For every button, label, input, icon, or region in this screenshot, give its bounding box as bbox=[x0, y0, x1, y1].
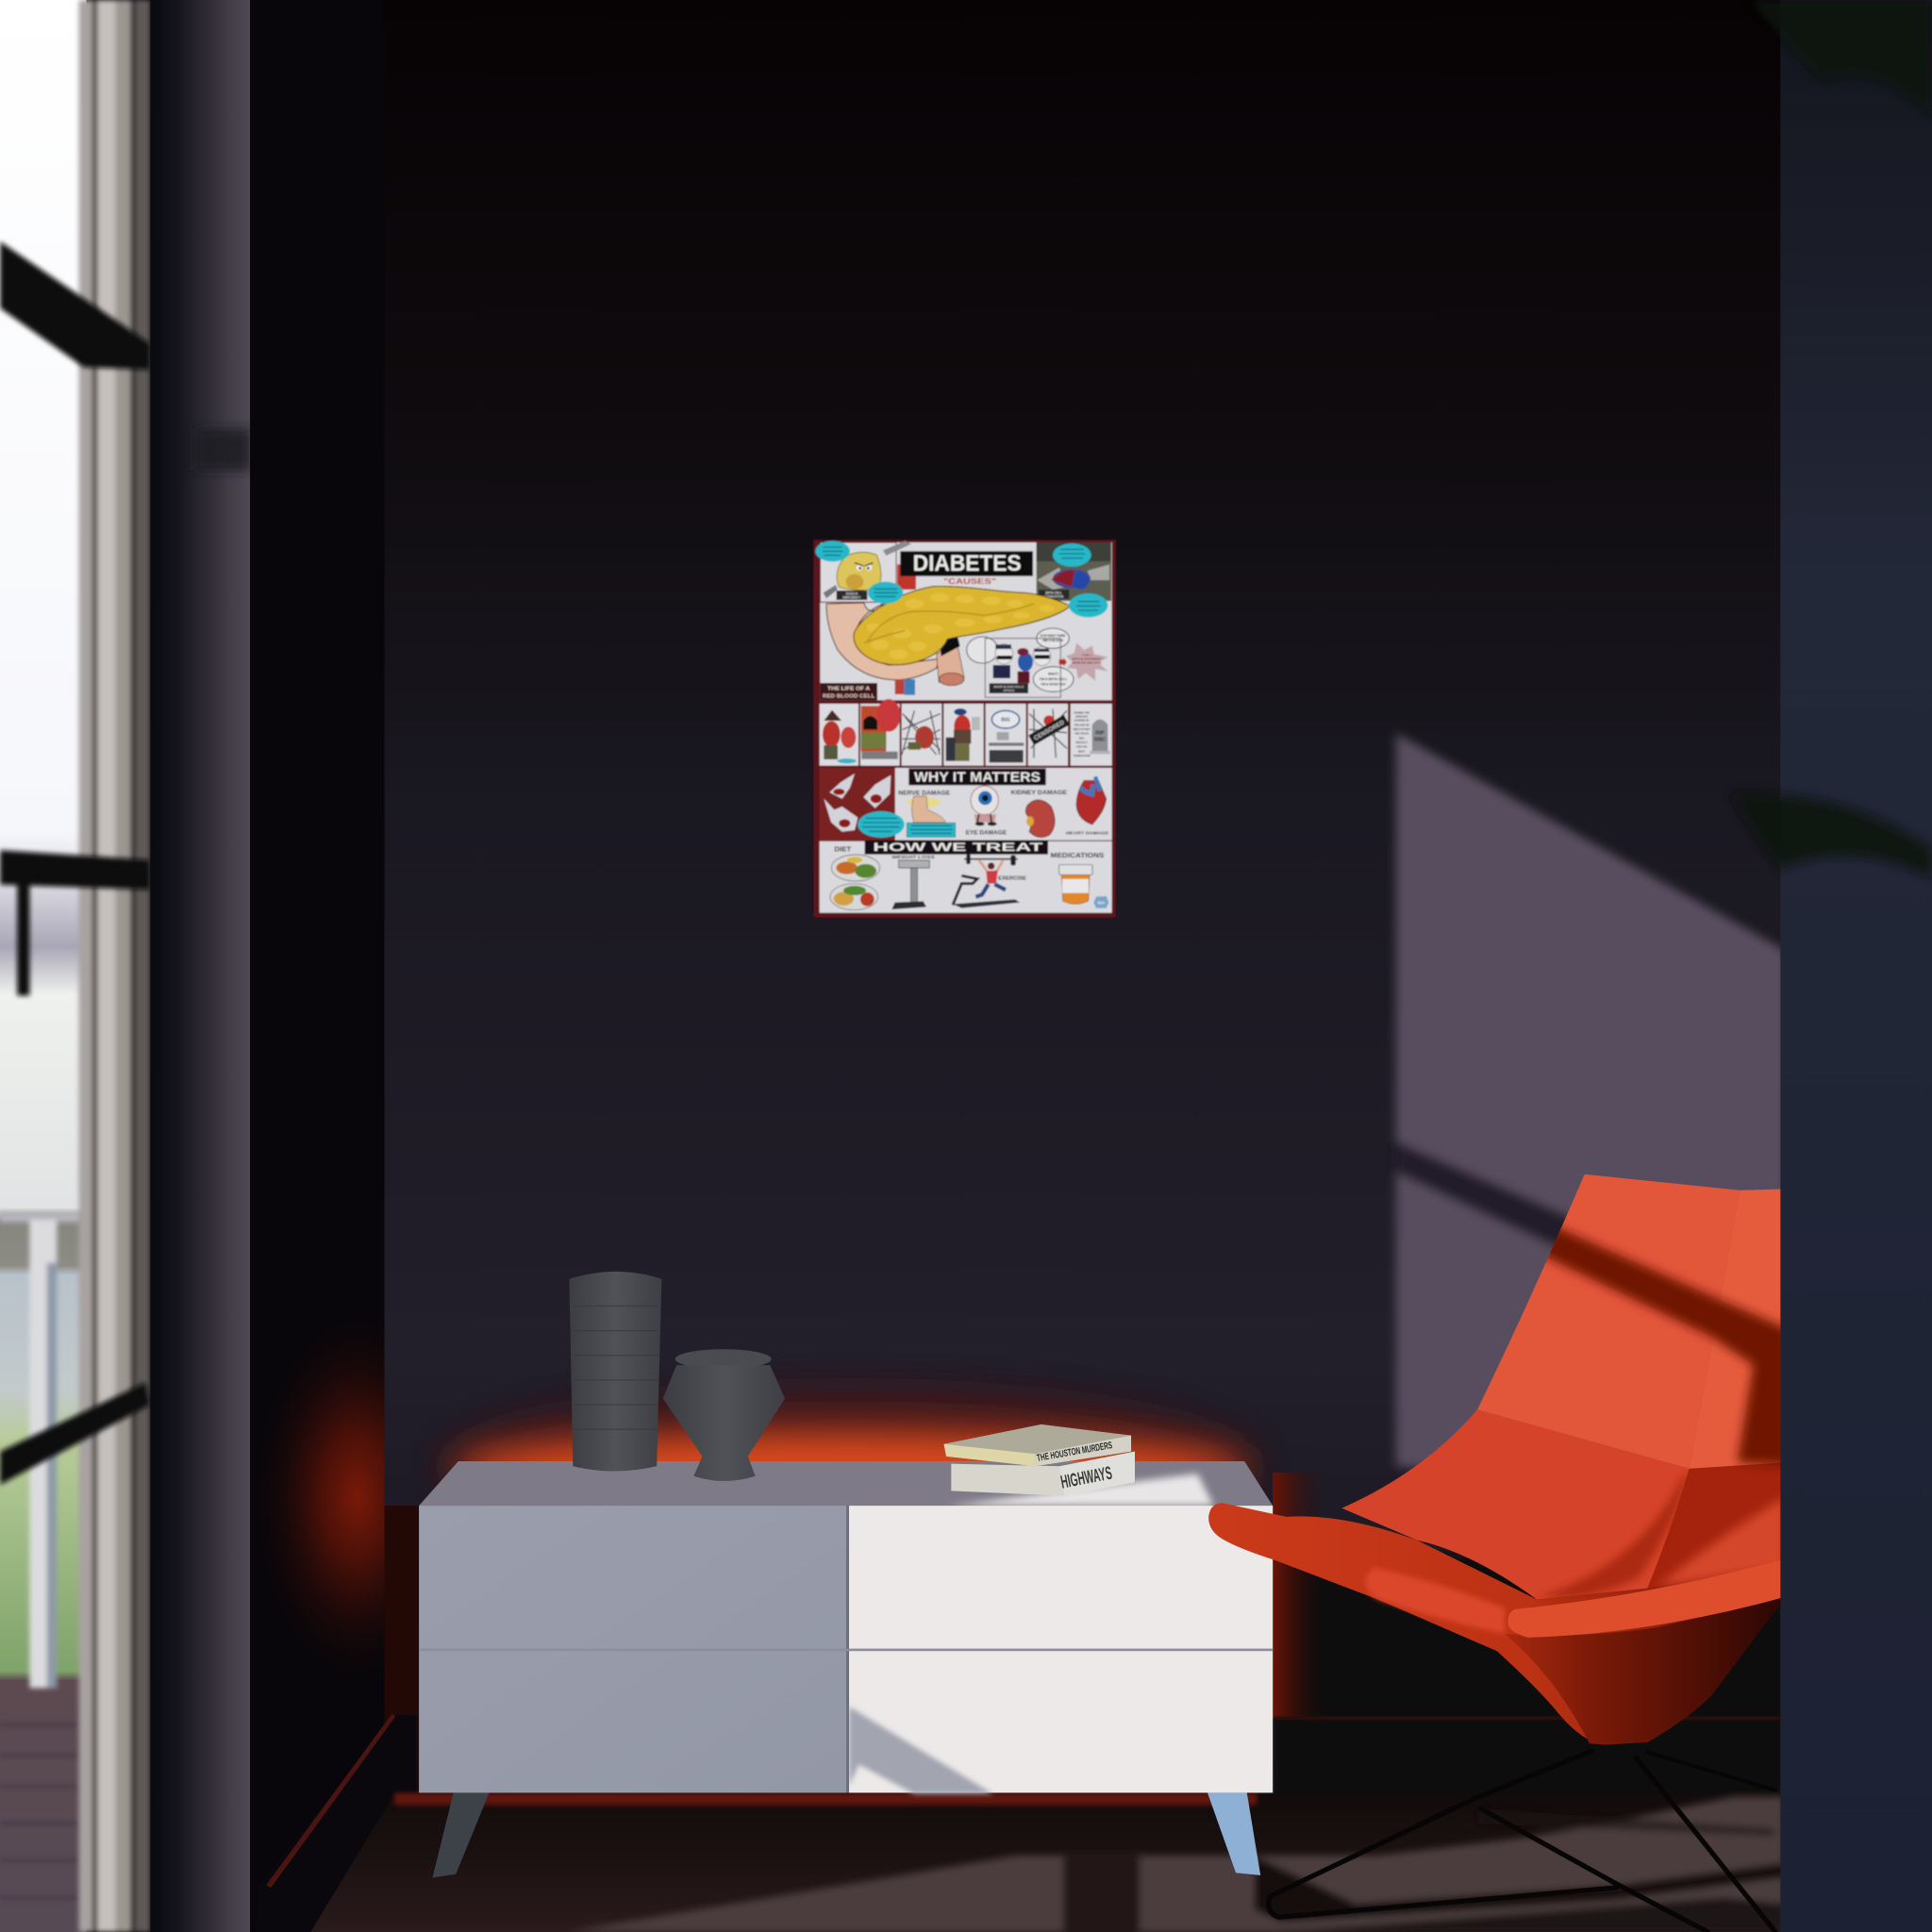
strip panel 7: NEXT bbox=[1078, 749, 1086, 753]
cyan callouts bbox=[815, 541, 1108, 617]
red glow beside sideboard bbox=[1273, 1473, 1324, 1719]
red blood cell story strip bbox=[820, 699, 1112, 766]
insulin deficiency panel bbox=[820, 542, 896, 602]
right foreground pillar bbox=[1780, 0, 1932, 1932]
character: exhausted beta cell bbox=[1053, 569, 1091, 588]
censored label: CENSORED bbox=[1033, 719, 1066, 742]
chair back bbox=[1477, 1174, 1740, 1469]
chair right seat highlight bbox=[1657, 1497, 1786, 1587]
icon: gravestone bbox=[1092, 719, 1108, 753]
label: insulin deficiency bbox=[837, 591, 867, 600]
title bar: DIABETES bbox=[913, 551, 1022, 576]
dim glow above sideboard bbox=[443, 1390, 1257, 1542]
sideboard right doors bbox=[849, 1506, 1273, 1792]
back wall bbox=[370, 0, 1799, 1932]
label: beta cell exhaustion bbox=[1039, 590, 1069, 599]
speech bubble lower right bbox=[1033, 667, 1074, 691]
icon: foot bbox=[908, 796, 945, 823]
stacked books bbox=[943, 1424, 1135, 1496]
speech text bbox=[1040, 633, 1068, 686]
strip panel 7 bbox=[1071, 704, 1112, 766]
starburst: type 1 diabetes: TYPE 1 bbox=[1082, 654, 1091, 658]
speech bubble left bbox=[967, 637, 998, 663]
strip panel 7: THE LIFE OF bbox=[1074, 723, 1090, 726]
icon: heart bbox=[1076, 776, 1107, 824]
duodenum bbox=[826, 603, 940, 680]
callout: insulin explanation bbox=[815, 541, 850, 561]
starburst: type 1 diabetes: DIABETES MELLITUS bbox=[1073, 661, 1101, 665]
small vase bbox=[663, 1349, 785, 1481]
chair seat shadow bbox=[1541, 1473, 1690, 1598]
sideboard top bbox=[419, 1461, 1273, 1506]
heading: life of a red blood cell: THE LIFE OF A bbox=[827, 686, 870, 691]
label: medications: MEDICATIONS bbox=[1051, 851, 1104, 859]
label: kidney damage: KIDNEY DAMAGE bbox=[1011, 790, 1068, 796]
heading: life of a red blood cell bbox=[820, 683, 877, 700]
callout text lines bbox=[823, 547, 1101, 610]
window exterior bbox=[0, 0, 86, 1932]
strip panel 2 bbox=[860, 699, 901, 766]
floor sunlight patches bbox=[567, 1796, 1784, 1932]
chair base bbox=[1269, 1751, 1775, 1932]
causes panel bbox=[820, 542, 1112, 700]
character: white cell one bbox=[995, 644, 1013, 664]
icon: logo badge bbox=[1093, 896, 1108, 908]
speech bubble top right bbox=[1037, 628, 1069, 648]
chair right back bbox=[1690, 1189, 1786, 1469]
orange glow above sideboard bbox=[456, 1432, 1244, 1506]
label: beta cell exhaustion: BETA CELL bbox=[1045, 591, 1062, 595]
strip panel 7: PROTECT bbox=[1075, 741, 1088, 744]
window mullions bbox=[0, 242, 150, 1485]
window frame bbox=[79, 0, 150, 1932]
icon: food plates bbox=[830, 855, 880, 910]
blurred plant leaves bbox=[1731, 0, 1932, 877]
panel: why it matters bbox=[895, 768, 1112, 841]
strip panel 5: BIG bbox=[1001, 718, 1010, 724]
label: insulin deficiency: DEFICIENCY bbox=[842, 595, 861, 599]
icon: logo badge: BAI bbox=[1098, 901, 1105, 906]
label: insulin deficiency: INSULIN bbox=[846, 592, 858, 596]
balcony rail and post bbox=[0, 1212, 81, 1688]
label: beta cell exhaustion: EXHAUSTION bbox=[1044, 594, 1064, 598]
strip panel 4 bbox=[943, 704, 984, 766]
starburst: type 1 diabetes: INSULIN DEPENDENT bbox=[1072, 658, 1102, 661]
strip panel 7: THE TRUTH bbox=[1074, 732, 1089, 736]
red strip under sideboard bbox=[394, 1792, 1257, 1805]
strip panel 7: RBC'S STORY bbox=[1074, 727, 1091, 731]
character: insulin cell bbox=[837, 552, 881, 591]
speech text: I'M A BETA CELL bbox=[1040, 676, 1068, 681]
arrow to starburst bbox=[1059, 658, 1067, 666]
character: white cell two bbox=[1033, 647, 1051, 666]
icon: white shark cell one bbox=[829, 774, 855, 799]
strip panel 3 bbox=[902, 704, 941, 766]
duct tube bbox=[937, 638, 964, 686]
strip panel 7: DURING THE bbox=[1074, 711, 1090, 715]
strip panel 5 bbox=[986, 704, 1026, 766]
syringes bbox=[824, 541, 911, 598]
sunlight patch on wall bbox=[1396, 733, 1787, 1491]
strip panel 6 bbox=[1028, 704, 1070, 766]
icon: weight scale bbox=[891, 860, 929, 909]
blood vessels bbox=[895, 679, 915, 695]
strip panel 7: GENERATION bbox=[1074, 754, 1090, 758]
callout: exhaustion explanation bbox=[1069, 593, 1108, 617]
panel: how we treat bbox=[820, 841, 1112, 913]
dark wall beneath chair bbox=[1273, 1555, 1784, 1802]
poster: Diabetes causes bbox=[813, 540, 1116, 918]
red glow in recess bbox=[272, 1347, 385, 1647]
comic panel: white blood cells: ATTACK bbox=[1003, 689, 1015, 692]
icon: person lifting on treadmill bbox=[953, 854, 1020, 908]
speech text: I'M A GOOD GUY bbox=[1041, 681, 1066, 686]
floor bbox=[310, 1794, 1787, 1932]
shadow band on pillar bbox=[194, 429, 250, 471]
beta cell exhaustion panel bbox=[1037, 542, 1111, 601]
strip of dark beside sideboard bbox=[385, 1506, 422, 1795]
label: heart damage: HEART DAMAGE bbox=[1066, 830, 1109, 836]
chair left rim bbox=[1365, 1567, 1505, 1634]
book spine title: THE HOUSTON MURDERS bbox=[1036, 1441, 1113, 1464]
chair underside bbox=[1505, 1597, 1786, 1744]
poster upper half bbox=[815, 541, 1112, 700]
strip panel 1 bbox=[820, 704, 858, 766]
label: white blood cells caption bbox=[990, 683, 1028, 693]
strip panel 7: AVERAGE bbox=[1075, 715, 1088, 719]
icon: pill bottle bbox=[1059, 865, 1092, 904]
strip panel 7: COURSE OF bbox=[1074, 719, 1090, 723]
chair right seat bbox=[1647, 1462, 1786, 1589]
speech text: TIME TO BE EATEN bbox=[1042, 638, 1063, 642]
strip panel 7: RIP bbox=[1095, 731, 1105, 737]
icon: eyeball character bbox=[971, 786, 998, 825]
label: nerve damage: NERVE DAMAGE bbox=[898, 791, 951, 797]
wall recess bbox=[250, 0, 385, 1932]
character: blue beta cell bbox=[1018, 653, 1033, 672]
strip panel 7: MAY bbox=[1079, 736, 1085, 740]
speech text: WAIT! bbox=[1048, 672, 1058, 676]
door shadow bbox=[849, 1707, 993, 1794]
skirting board bbox=[257, 1714, 1784, 1932]
label: exercise: EXERCISE bbox=[998, 876, 1026, 882]
pancreas bbox=[854, 586, 1070, 665]
icon: white shark cell three bbox=[824, 799, 858, 832]
comic panel: white blood cells bbox=[985, 639, 1060, 697]
subtitle: "CAUSES" bbox=[943, 577, 996, 586]
poster lower half bbox=[820, 699, 1112, 913]
left pillar bbox=[150, 0, 250, 1932]
speech text: STOP RIGHT THERE bbox=[1041, 633, 1066, 638]
strip panel 7: RBC bbox=[1094, 737, 1106, 742]
label: eye damage: EYE DAMAGE bbox=[966, 830, 1007, 837]
stacked books: HIGHWAYS bbox=[1059, 1463, 1114, 1493]
starburst: type 1 diabetes bbox=[1066, 643, 1108, 681]
chair right rim bbox=[1507, 1558, 1786, 1638]
comic panel: white blood cells: WHITE BLOOD CELLS bbox=[993, 685, 1024, 689]
icon: kidney character bbox=[1025, 800, 1055, 838]
sideboard bbox=[419, 1461, 1273, 1878]
heading: life of a red blood cell: RED BLOOD CELL bbox=[823, 693, 875, 699]
chair seat bbox=[1341, 1409, 1690, 1599]
callout: white cell explanation bbox=[858, 811, 905, 838]
sideboard legs bbox=[432, 1792, 490, 1878]
poster frame bbox=[813, 540, 1116, 918]
speech bubbles bbox=[967, 628, 1074, 691]
sideboard left doors bbox=[419, 1506, 846, 1792]
label: diet: DIET bbox=[834, 847, 852, 854]
heading: how we treat bbox=[865, 841, 1048, 855]
strip panel 7: FOR THE bbox=[1076, 745, 1088, 749]
red duct behind title bbox=[897, 564, 916, 590]
sideboard top sunlight bbox=[949, 1474, 1214, 1506]
orange lounge chair bbox=[1208, 1174, 1789, 1932]
tall vase bbox=[569, 1272, 661, 1472]
callout: beta cell explanation bbox=[1053, 543, 1091, 567]
icon: white shark cell two bbox=[863, 775, 891, 808]
label: weight loss: WEIGHT LOSS bbox=[891, 855, 936, 860]
heading: how we treat: HOW WE TREAT bbox=[873, 841, 1044, 854]
chair shell bbox=[1208, 1503, 1786, 1744]
callout: nerve damage note bbox=[907, 823, 956, 837]
panel: red blood background bbox=[820, 768, 905, 841]
chair shadows bbox=[1541, 1220, 1789, 1466]
heading: why it matters: WHY IT MATTERS bbox=[914, 771, 1041, 786]
deck planks bbox=[0, 1725, 79, 1897]
callout: resistance explanation bbox=[868, 582, 903, 604]
